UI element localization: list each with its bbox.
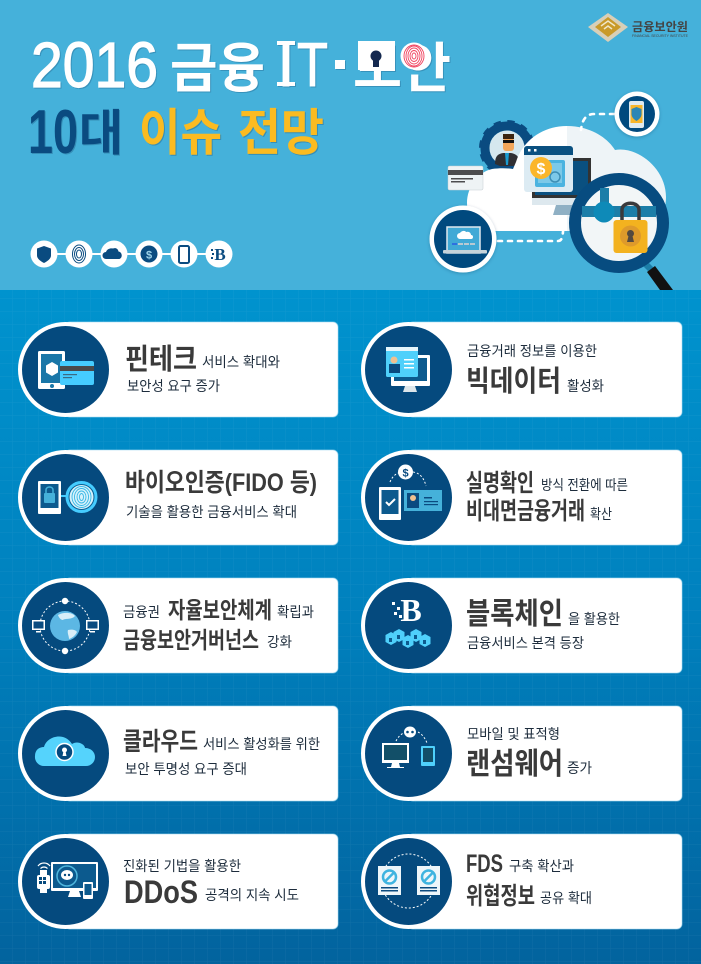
text: self-regulated security: 강화 (267, 634, 292, 650)
title line 1: 금융 (170, 39, 265, 99)
text: fintech: 보안성 요구 증가 (127, 378, 220, 394)
text: big data (466, 343, 604, 398)
panel: ddos (18, 834, 338, 929)
header background (0, 0, 701, 291)
icon: monitor tablet and skull (382, 726, 435, 768)
icon: blocked documents (378, 854, 440, 908)
text: ransomware: 모바일 및 표적형 (467, 726, 560, 742)
text: self-regulated security: 금융권 (123, 604, 160, 620)
illustration: magnifier with lock (575, 179, 673, 290)
text: ransomware (466, 726, 592, 781)
text: cloud: 클라우드 (123, 728, 198, 756)
panel: big data (361, 322, 682, 417)
illustration: credit card (448, 166, 483, 190)
text: cloud (123, 728, 320, 777)
text: big data: 금융거래 정보를 이용한 (467, 343, 597, 359)
text: fds: 위협정보 (466, 883, 535, 910)
text: ddos: DDoS (124, 874, 198, 910)
text: real-name verification (466, 470, 628, 525)
title line 1: I (277, 31, 295, 100)
text: real-name verification: 방식 전환에 따른 (541, 477, 628, 493)
icon: blockchain cubes (386, 592, 430, 648)
icon: phone id card and coin: $ (402, 468, 409, 480)
text: self-regulated security: 확립과 (277, 604, 314, 620)
icon: blockchain cubes: B (400, 592, 422, 628)
text: ddos: 진화된 기법을 활용한 (123, 858, 241, 874)
title line 1: 보안 (353, 39, 451, 99)
icon: devices under attack (37, 862, 98, 899)
text: ddos: 공격의 지속 시도 (205, 887, 299, 903)
text: blockchain: 금융서비스 본격 등장 (467, 635, 584, 651)
text: self-regulated security (123, 597, 314, 653)
title line 2 (28, 98, 324, 167)
icon: fingerprint in title (400, 42, 428, 70)
illustration: security gear with agent (482, 123, 532, 173)
illustration: phone badge (614, 92, 660, 136)
panel: ransomware (361, 706, 682, 801)
text: fintech: 핀테크 (125, 343, 197, 376)
topic icon row (30, 240, 232, 268)
text: big data: 빅데이터 (466, 365, 561, 398)
panel: self-regulated security (18, 578, 338, 673)
title line 2: 전망 (238, 105, 324, 161)
title line 1 (31, 29, 451, 101)
text: real-name verification: 확산 (590, 506, 612, 522)
icon: phone id card and coin (379, 464, 442, 520)
text: fds: FDS (466, 850, 503, 878)
text: blockchain: 을 활용한 (568, 611, 620, 627)
icon: cloud keyhole (35, 737, 95, 766)
icon: monitor with profile (386, 347, 430, 392)
text: fds (466, 850, 592, 910)
panel: blockchain (361, 578, 682, 673)
title line 2: 대 (79, 107, 123, 161)
topic icon row: $ (146, 250, 152, 262)
text: fintech (125, 343, 280, 394)
text: self-regulated security: 금융보안거버넌스 (123, 627, 259, 653)
text: biometrics: 바이오인증(FIDO 등) (125, 469, 317, 497)
text: biometrics (125, 469, 317, 520)
text: biometrics: 기술을 활용한 금융서비스 확대 (126, 504, 297, 520)
text: ransomware: 증가 (567, 760, 592, 776)
title line 1: 2016 (31, 29, 158, 101)
icon: globe and monitors (32, 598, 99, 654)
illustration: cloud (467, 126, 666, 231)
icon: phone lock and fingerprint (38, 481, 96, 514)
panel: cloud (18, 706, 338, 801)
text: real-name verification: 비대면금융거래 (466, 498, 585, 525)
topic icon row: B (214, 245, 226, 264)
illustration: laptop badge (430, 206, 496, 272)
text: fds: 공유 확대 (540, 890, 592, 906)
title line 1: T (297, 31, 328, 100)
icon: phone and card (38, 351, 94, 389)
logo (588, 13, 689, 42)
text: fds: 구축 확산과 (509, 858, 574, 874)
text: blockchain (466, 598, 620, 651)
body background (0, 290, 701, 964)
panel: real-name verification (361, 450, 682, 545)
illustration: monitor and safe window: $ (537, 161, 546, 178)
panel: biometrics (18, 450, 338, 545)
panel: fintech (18, 322, 338, 417)
text: ransomware: 랜섬웨어 (466, 748, 563, 781)
title line 2: 10 (28, 98, 78, 167)
text: real-name verification: 실명확인 (466, 470, 534, 497)
illustration: dashed connectors (498, 114, 614, 241)
text: big data: 활성화 (567, 378, 604, 394)
icon: keyhole in title (358, 41, 395, 70)
logo: 금융보안원 (632, 20, 688, 34)
text: cloud: 보안 투명성 요구 증대 (125, 761, 247, 777)
text: cloud: 서비스 활성화를 위한 (203, 736, 320, 752)
text: fintech: 서비스 확대와 (202, 354, 280, 370)
logo: FINANCIAL SECURITY INSTITUTE (632, 34, 689, 38)
body grid (0, 290, 701, 964)
panel: fds (361, 834, 682, 929)
text: self-regulated security: 자율보안체계 (168, 597, 272, 623)
text: blockchain: 블록체인 (466, 598, 563, 631)
illustration: monitor and safe window (524, 146, 591, 215)
text: ddos (123, 858, 299, 910)
title line 2: 이슈 (139, 105, 222, 161)
